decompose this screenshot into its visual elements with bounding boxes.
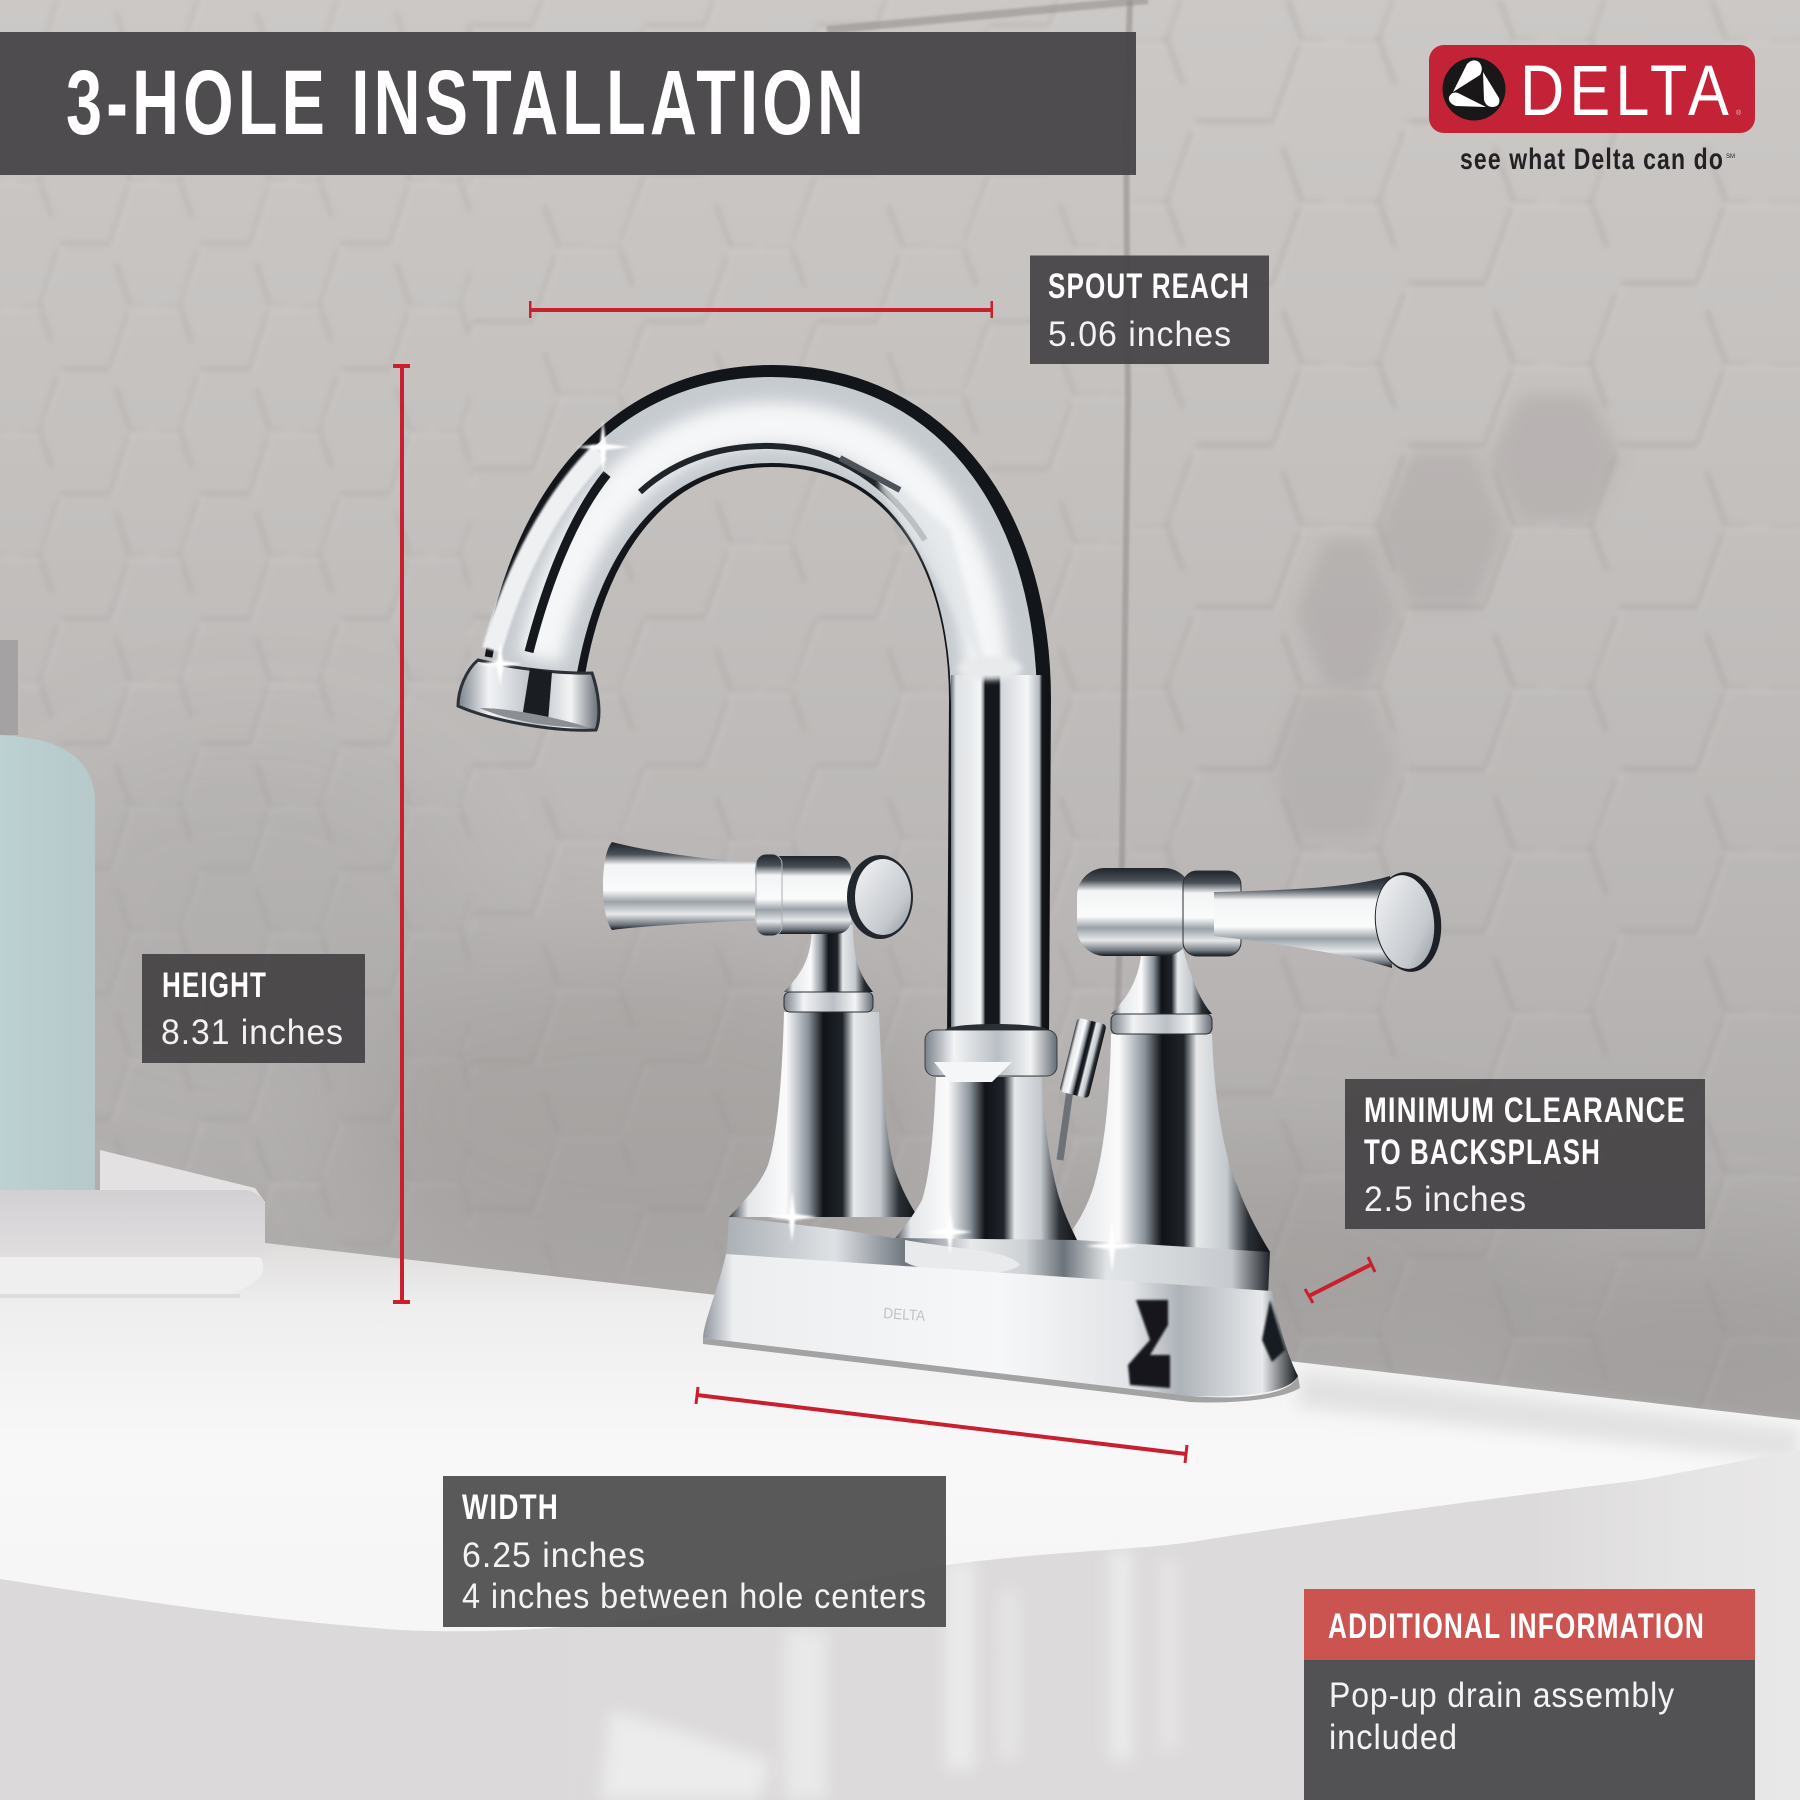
- panel body: Pop-up drain assembly: [1329, 1676, 1675, 1715]
- panel header: [1304, 1589, 1755, 1660]
- minimum clearance label: 2.5 inches: [1364, 1180, 1527, 1219]
- logo: triangle mark: [1442, 58, 1506, 120]
- height label: HEIGHT: [162, 966, 267, 1005]
- panel body: included: [1329, 1718, 1458, 1757]
- soap tray: [0, 1150, 265, 1298]
- faucet: [458, 416, 1446, 1402]
- spout reach label: 5.06 inches: [1048, 315, 1232, 354]
- faucet: sparkles: [478, 420, 1138, 1272]
- faucet: centre body: [892, 1024, 1078, 1242]
- spout reach label: SPOUT REACH: [1048, 267, 1250, 306]
- panel: additional information: [1304, 1589, 1755, 1800]
- width dimension line: [696, 1387, 1187, 1463]
- width label: 6.25 inches: [462, 1536, 646, 1575]
- logo: service mark: SM: [1726, 154, 1735, 160]
- panel body: [1304, 1660, 1755, 1800]
- logo: tagline: see what Delta can do: [1460, 143, 1724, 176]
- height label: [142, 954, 365, 1063]
- faucet: deck plate: DELTA: [883, 1305, 926, 1325]
- countertop and basin: [0, 1212, 1800, 1800]
- faucet: right handle: [1054, 868, 1446, 1252]
- logo: registered mark: ®: [1736, 109, 1742, 117]
- minimum clearance label: TO BACKSPLASH: [1364, 1133, 1601, 1172]
- height dimension line: [393, 364, 410, 1304]
- faucet: lift rod: [1059, 1017, 1107, 1160]
- height label: 8.31 inches: [161, 1013, 344, 1052]
- spout reach dimension line: [529, 301, 993, 318]
- logo: red badge: [1429, 45, 1755, 133]
- title banner: 3-HOLE INSTALLATION: [66, 52, 868, 154]
- faucet: spout arch: [492, 416, 1049, 1040]
- title banner: [0, 32, 1136, 175]
- faucet: deck plate: [703, 1254, 1300, 1402]
- faucet: left handle: [603, 842, 918, 1217]
- soap bottle: [0, 640, 95, 1190]
- spout reach label: [1030, 256, 1269, 364]
- logo: wordmark: DELTA: [1520, 52, 1734, 131]
- faucet: deck ring: [726, 1217, 1270, 1295]
- width label: WIDTH: [462, 1488, 559, 1527]
- width label: [443, 1476, 946, 1627]
- width label: 4 inches between hole centers: [462, 1577, 927, 1616]
- minimum clearance label: MINIMUM CLEARANCE: [1364, 1091, 1686, 1130]
- faucet: aerator: [458, 660, 599, 730]
- background: tiled wall: [0, 0, 1800, 1440]
- Delta logo: [1429, 45, 1755, 176]
- minimum clearance label: [1345, 1079, 1705, 1229]
- clearance dimension line: [1305, 1257, 1375, 1303]
